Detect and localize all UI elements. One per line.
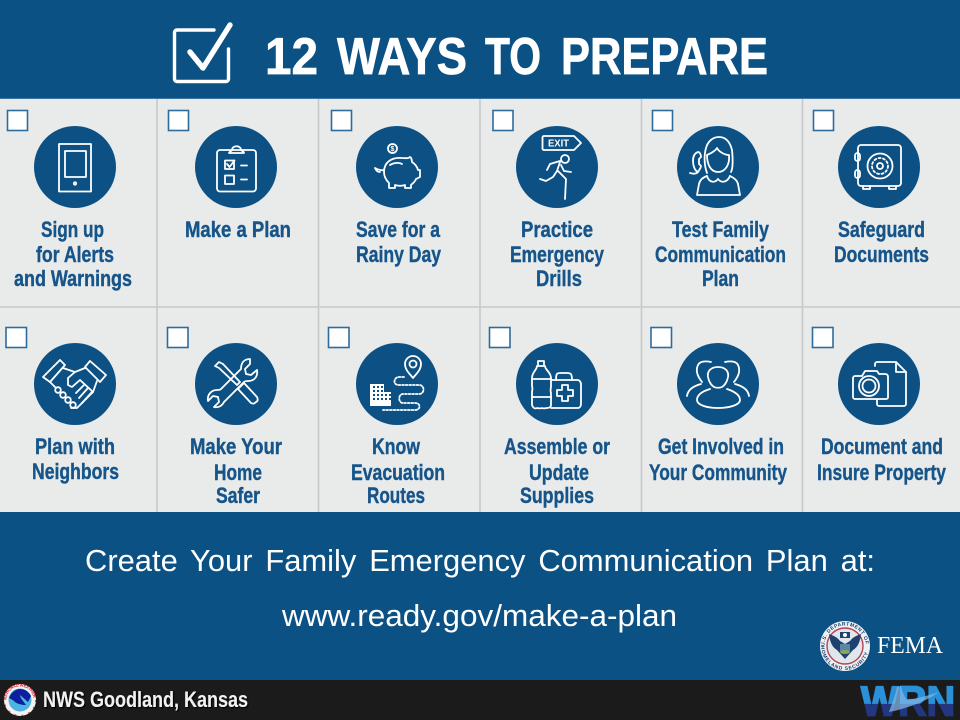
item: assemble or update supplies: Assemble or: [504, 434, 610, 459]
title: [265, 28, 768, 86]
item: know evacuation routes: [328, 328, 445, 508]
NWS logo: [4, 684, 36, 716]
item: make your home safer: Make Your: [190, 434, 282, 459]
item: test family communication plan: Communication: [655, 242, 786, 267]
item: test family communication plan: [652, 110, 786, 291]
item: save for a rainy day: Rainy Day: [356, 242, 441, 267]
item: get involved in your community: Your Community: [649, 460, 787, 485]
item: make a plan: [168, 110, 291, 242]
item: know evacuation routes: Know: [372, 434, 420, 459]
item: plan with neighbors: Neighbors: [32, 459, 119, 484]
item: get involved in your community: Get Involved in: [658, 434, 784, 459]
item: sign up for alerts: Sign up: [41, 217, 104, 242]
panel: checklist grid: [0, 98, 960, 512]
item: save for a rainy day: Save for a: [356, 217, 440, 242]
item: practice emergency drills: Drills: [536, 266, 582, 291]
DHS seal: U.S. DEPARTMENT OF: [821, 622, 869, 646]
item: save for a rainy day: $: [390, 146, 394, 153]
item: plan with neighbors: Plan with: [35, 434, 115, 459]
title checkbox icon: [174, 25, 230, 82]
footer panel: [0, 512, 960, 680]
FEMA wordmark: FEMA: [877, 633, 944, 659]
item: know evacuation routes: Routes: [367, 483, 425, 508]
item: safeguard documents: [814, 110, 929, 267]
title: 12: [265, 28, 318, 86]
item: assemble or update supplies: [490, 328, 610, 508]
item: sign up for alerts: [8, 110, 132, 291]
item: safeguard documents: Safeguard: [838, 217, 925, 242]
NWS Goodland label: NWS Goodland, Kansas: [43, 687, 248, 712]
item: make a plan: Make a Plan: [185, 217, 291, 242]
item: test family communication plan: Test Family: [672, 217, 769, 242]
item: plan with neighbors: [6, 328, 119, 484]
title: WAYS: [337, 28, 467, 86]
item: practice emergency drills: EXIT: [548, 138, 569, 150]
item: make your home safer: Safer: [216, 483, 260, 508]
item: make your home safer: [168, 328, 282, 508]
NWS logo: NATIONAL WEATHER: [4, 684, 36, 700]
header band: [0, 0, 960, 98]
title: PREPARE: [561, 28, 768, 86]
item: assemble or update supplies: Update: [529, 460, 589, 485]
item: save for a rainy day: [332, 110, 441, 267]
item: document and insure property: [812, 328, 946, 485]
item: sign up for alerts: and Warnings: [14, 266, 132, 291]
call to action text: Create Your Family Emergency Communication Plan at:: [85, 544, 875, 578]
item: know evacuation routes: Evacuation: [351, 460, 445, 485]
bottom bar: [0, 680, 960, 720]
DHS seal: [820, 621, 870, 671]
website link text: www.ready.gov/make-a-plan: [281, 599, 677, 633]
item: practice emergency drills: [493, 110, 604, 291]
item: practice emergency drills: Emergency: [510, 242, 604, 267]
item: make your home safer: Home: [214, 460, 262, 485]
item: practice emergency drills: Practice: [521, 217, 593, 242]
title: TO: [485, 28, 541, 86]
item: assemble or update supplies: Supplies: [520, 483, 594, 508]
DHS seal: HOMELAND SECURITY: [821, 646, 868, 670]
item: test family communication plan: Plan: [702, 266, 739, 291]
item: sign up for alerts: for Alerts: [36, 242, 114, 267]
item: safeguard documents: Documents: [834, 242, 929, 267]
item: get involved in your community: [649, 328, 787, 485]
